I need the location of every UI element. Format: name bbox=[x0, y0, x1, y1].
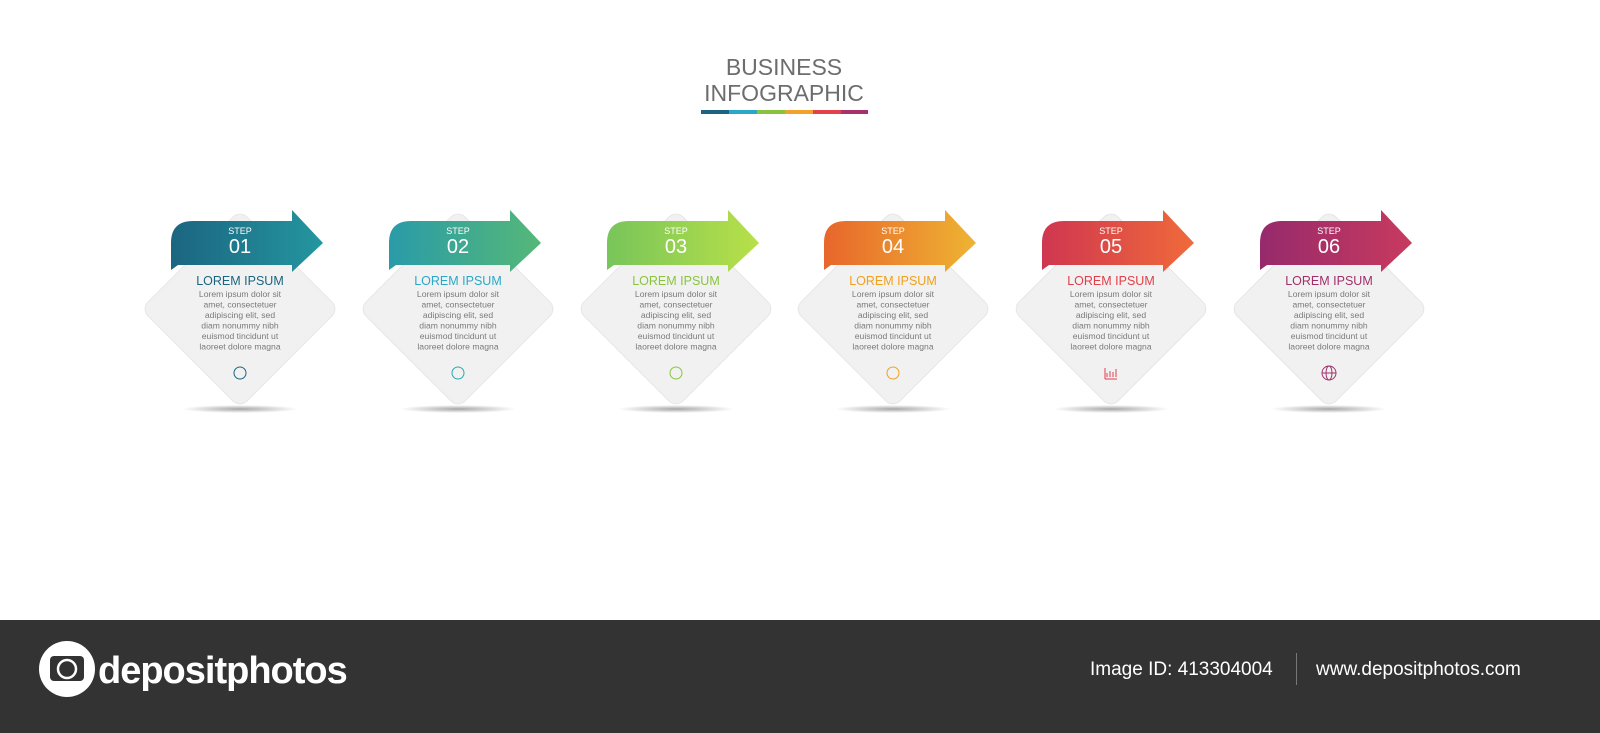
footer id: Image ID: 413304004 bbox=[1090, 659, 1273, 680]
step 06: LOREM IPSUM bbox=[1285, 274, 1373, 288]
title: BUSINESS bbox=[726, 54, 842, 80]
step 06 bbox=[1230, 210, 1428, 413]
step 01: euismod tincidunt ut bbox=[202, 331, 279, 341]
step 05: laoreet dolore magna bbox=[1070, 342, 1152, 352]
step 02: amet, consectetuer bbox=[421, 300, 495, 310]
step 02: 02 bbox=[447, 236, 469, 258]
step 04 bbox=[794, 210, 992, 413]
step 04: STEP bbox=[881, 226, 905, 236]
step 04: diam nonummy nibh bbox=[854, 320, 932, 330]
step 03: amet, consectetuer bbox=[639, 300, 713, 310]
step 06: euismod tincidunt ut bbox=[1291, 331, 1368, 341]
step 03: LOREM IPSUM bbox=[632, 274, 720, 288]
step 01 bbox=[141, 210, 339, 413]
footer logo bbox=[39, 641, 347, 697]
step 04: Lorem ipsum dolor sit bbox=[852, 289, 935, 299]
step 01: adipiscing elit, sed bbox=[205, 310, 275, 320]
step 05: amet, consectetuer bbox=[1074, 300, 1148, 310]
step 03: laoreet dolore magna bbox=[635, 342, 717, 352]
step 02 bbox=[359, 210, 557, 413]
step 03: diam nonummy nibh bbox=[637, 320, 715, 330]
step 04: adipiscing elit, sed bbox=[858, 310, 928, 320]
footer logo: depositphotos bbox=[98, 650, 347, 692]
step 01: 01 bbox=[229, 236, 251, 258]
step 04: 04 bbox=[882, 236, 904, 258]
step 06: diam nonummy nibh bbox=[1290, 320, 1368, 330]
step 06: laoreet dolore magna bbox=[1288, 342, 1370, 352]
step 05 bbox=[1012, 210, 1210, 413]
step 06: Lorem ipsum dolor sit bbox=[1288, 289, 1371, 299]
step 03: 03 bbox=[665, 236, 687, 258]
footer bar bbox=[0, 620, 1600, 733]
title color bar bbox=[701, 110, 868, 114]
step 04: LOREM IPSUM bbox=[849, 274, 937, 288]
step 05: STEP bbox=[1099, 226, 1123, 236]
step 04: laoreet dolore magna bbox=[852, 342, 934, 352]
step 06: STEP bbox=[1317, 226, 1341, 236]
step 06: 06 bbox=[1318, 236, 1340, 258]
step 03: STEP bbox=[664, 226, 688, 236]
step 02: Lorem ipsum dolor sit bbox=[417, 289, 500, 299]
step 01: diam nonummy nibh bbox=[201, 320, 279, 330]
title: INFOGRAPHIC bbox=[704, 80, 864, 106]
step 05: diam nonummy nibh bbox=[1072, 320, 1150, 330]
step 01: laoreet dolore magna bbox=[199, 342, 281, 352]
step 04: amet, consectetuer bbox=[856, 300, 930, 310]
step 03 bbox=[577, 210, 775, 413]
step 01: Lorem ipsum dolor sit bbox=[199, 289, 282, 299]
step 02: STEP bbox=[446, 226, 470, 236]
step 05: Lorem ipsum dolor sit bbox=[1070, 289, 1153, 299]
step 01: amet, consectetuer bbox=[203, 300, 277, 310]
step 02: laoreet dolore magna bbox=[417, 342, 499, 352]
step 06: amet, consectetuer bbox=[1292, 300, 1366, 310]
step 03: adipiscing elit, sed bbox=[641, 310, 711, 320]
step 02: diam nonummy nibh bbox=[419, 320, 497, 330]
step 04: euismod tincidunt ut bbox=[855, 331, 932, 341]
step 01: LOREM IPSUM bbox=[196, 274, 284, 288]
step 05: euismod tincidunt ut bbox=[1073, 331, 1150, 341]
step 03: Lorem ipsum dolor sit bbox=[635, 289, 718, 299]
step 02: euismod tincidunt ut bbox=[420, 331, 497, 341]
step 01: STEP bbox=[228, 226, 252, 236]
title bbox=[704, 54, 864, 106]
footer url: www.depositphotos.com bbox=[1315, 659, 1521, 680]
step 02: LOREM IPSUM bbox=[414, 274, 502, 288]
step 05: LOREM IPSUM bbox=[1067, 274, 1155, 288]
step 05: adipiscing elit, sed bbox=[1076, 310, 1146, 320]
step 02: adipiscing elit, sed bbox=[423, 310, 493, 320]
step 06: adipiscing elit, sed bbox=[1294, 310, 1364, 320]
step 05: 05 bbox=[1100, 236, 1122, 258]
step 03: euismod tincidunt ut bbox=[638, 331, 715, 341]
